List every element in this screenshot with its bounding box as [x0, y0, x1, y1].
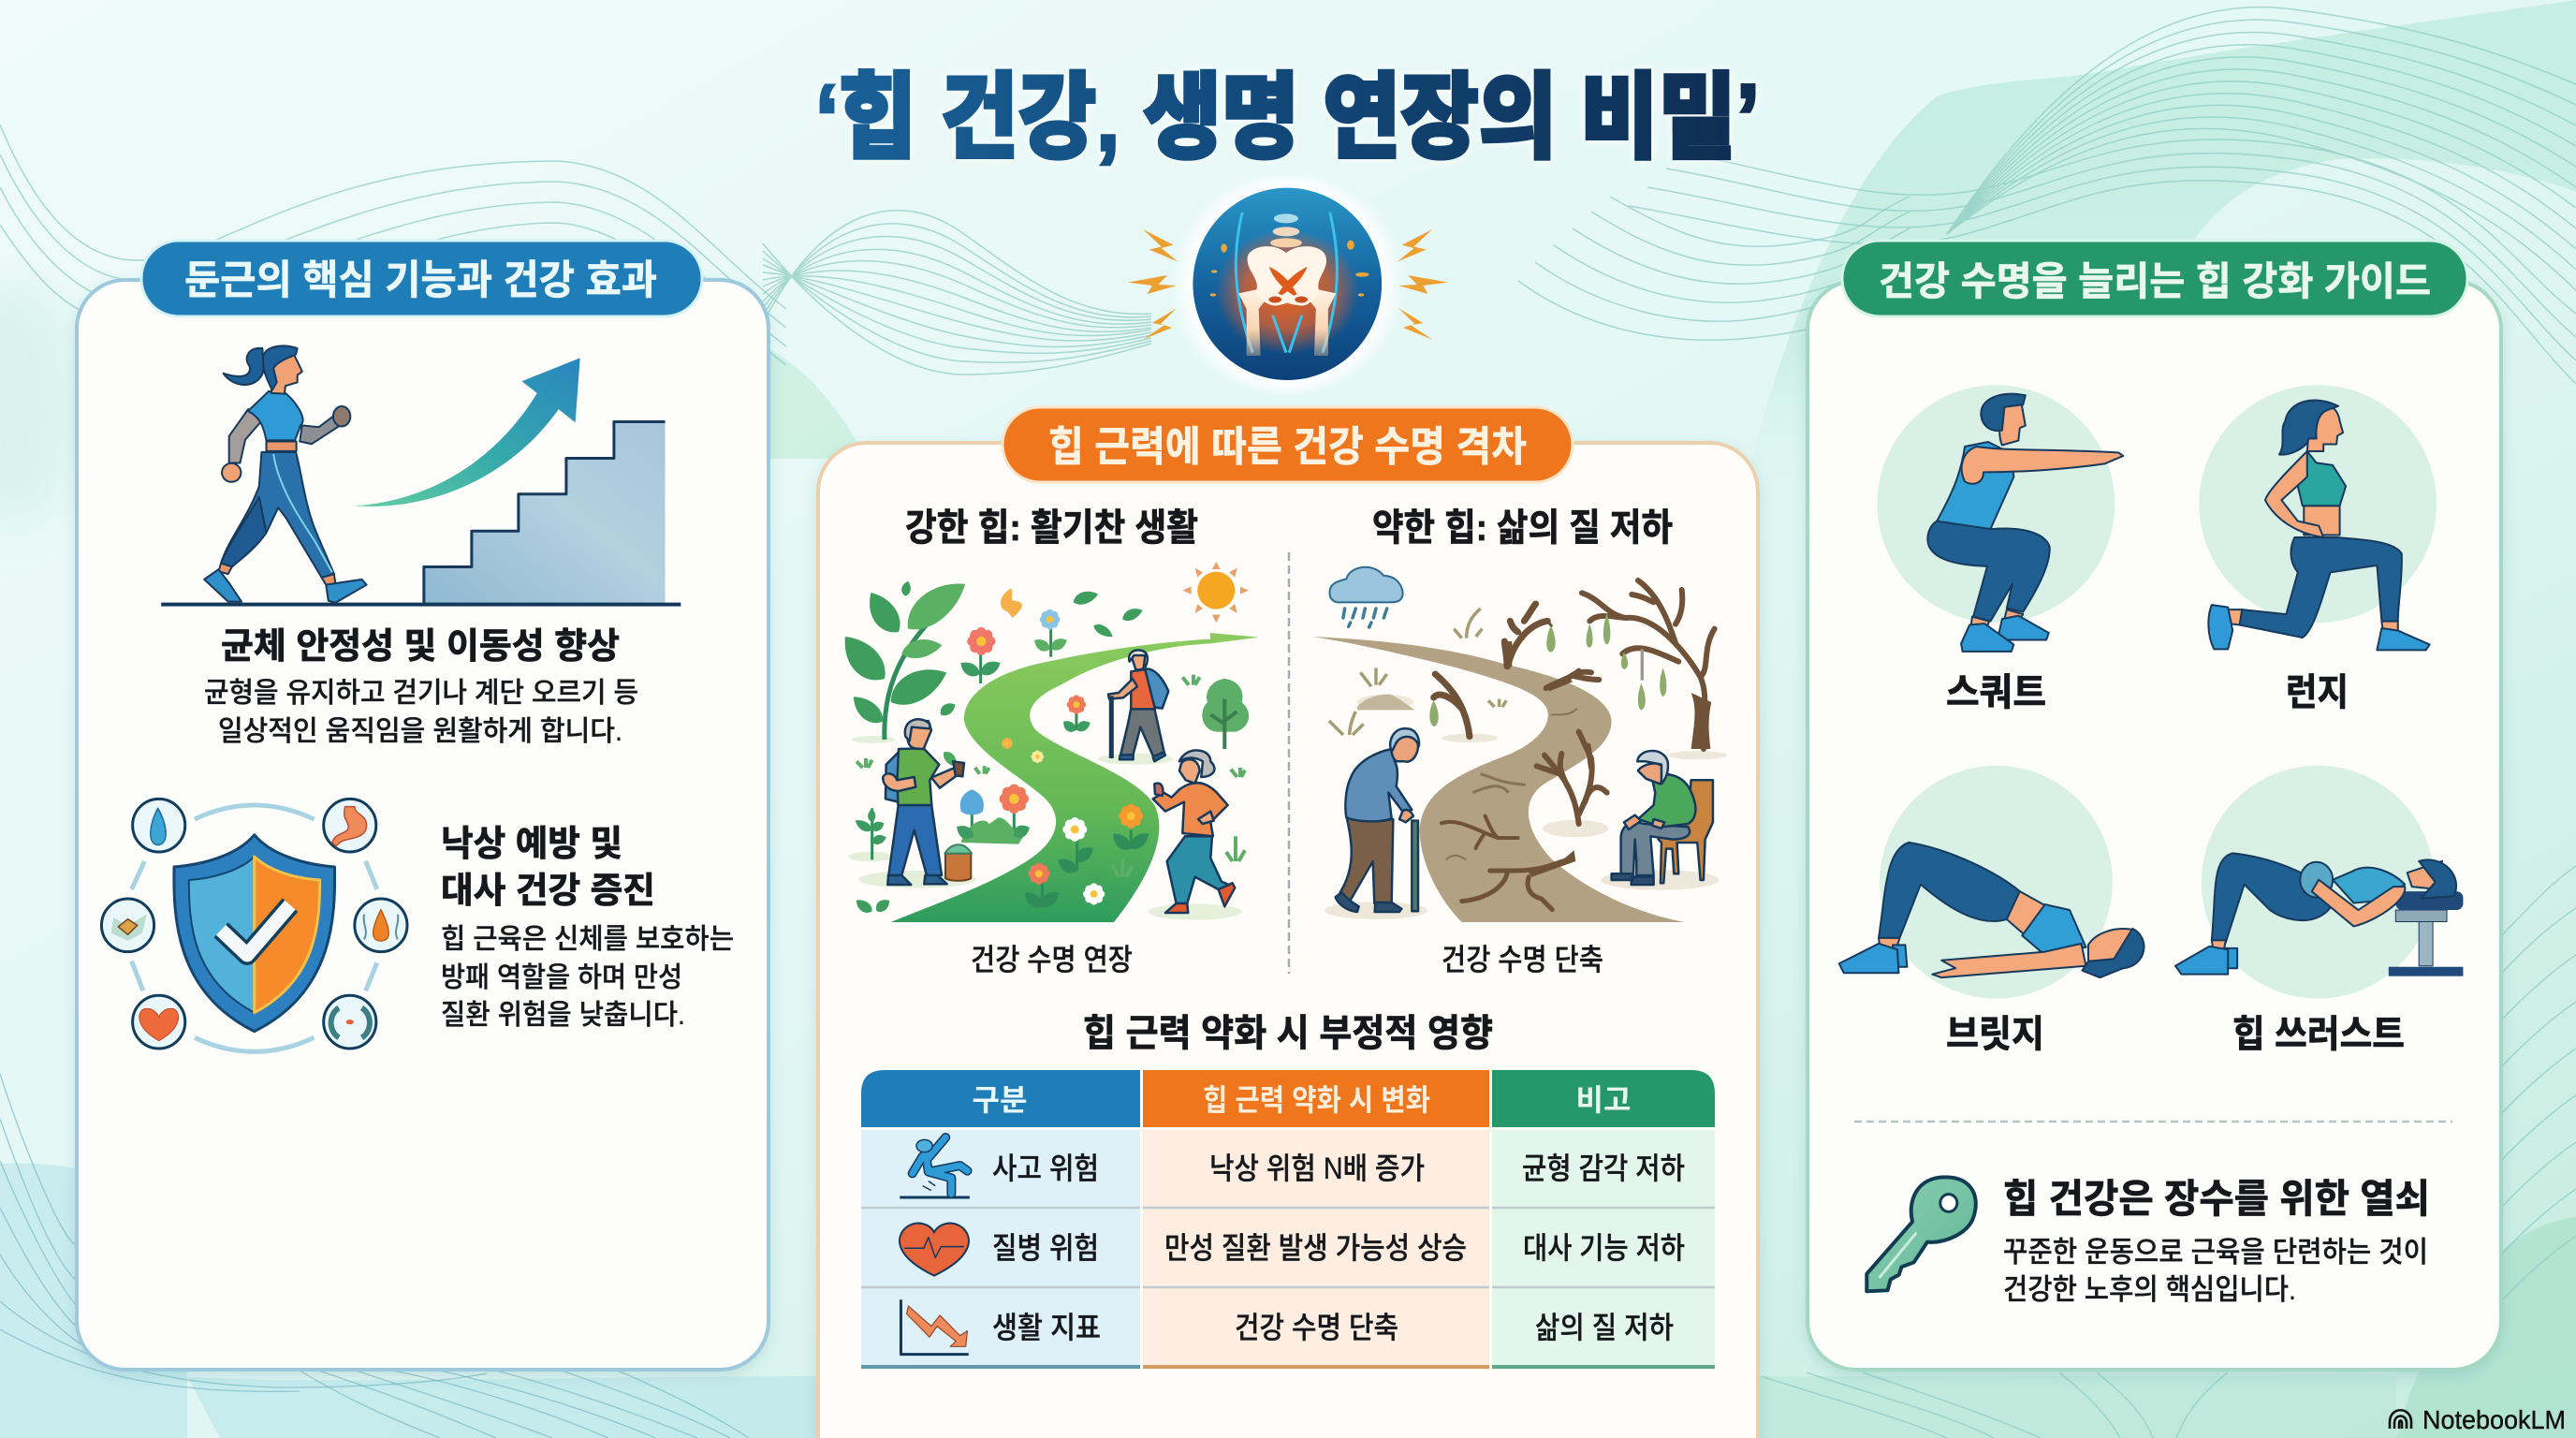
table: negative effects of weak hips: 만성 질환 발생 가능성 상승: [1164, 1231, 1467, 1265]
table: negative effects of weak hips: 삶의 질 저하: [1535, 1311, 1674, 1344]
illustration: active life on green path: [833, 562, 1259, 922]
table: negative effects of weak hips: 낙상 위험 N배 증가: [1209, 1152, 1425, 1185]
icon: key: [1866, 1177, 1976, 1291]
heading: negative effects: 힙 근력 약화 시 부정적 영향: [1083, 1013, 1493, 1054]
panel: health span gap by hip strength: [818, 407, 1758, 1438]
heading pill: glute functions: [141, 241, 702, 316]
table: negative effects of weak hips: 대사 기능 저하: [1523, 1231, 1685, 1265]
text: key message: 힙 건강은 장수를 위한 열쇠: [2003, 1177, 2430, 1221]
panel: hip strengthening guide: [1808, 241, 2501, 1370]
text: balance and mobility: [204, 627, 638, 747]
title: ‘힙 건강, 생명 연장의 비밀’: [815, 66, 1760, 170]
text: balance and mobility: 균체 안정성 및 이동성 향상: [221, 627, 620, 667]
heading pill: hip strengthening guide: 건강 수명을 늘리는 힙 강화 가이드: [1879, 259, 2431, 303]
label: bridge: 브릿지: [1946, 1014, 2044, 1055]
label: hip thrust: 힙 쓰러스트: [2232, 1014, 2405, 1055]
icon: declining chart: [900, 1299, 969, 1355]
table: negative effects of weak hips: 비고: [1576, 1083, 1631, 1117]
icon: hip bones emblem: [1128, 176, 1448, 391]
watermark: NotebookLM: NotebookLM: [2422, 1405, 2566, 1434]
illustration: declining life on dry path: [1312, 567, 1727, 922]
label: squat: 스쿼트: [1946, 672, 2046, 713]
text: balance and mobility: 일상적인 움직임을 원활하게 합니다.: [218, 716, 622, 747]
illustration: bridge: [1839, 766, 2144, 999]
panel: glute functions and health effects: [77, 241, 768, 1370]
subheading: weak hips: 약한 힙: 삶의 질 저하: [1372, 507, 1673, 549]
heading pill: health span gap: 힙 근력에 따른 건강 수명 격차: [1048, 424, 1527, 470]
illustration: walking woman, arrow and stairs: [161, 345, 681, 605]
text: fall prevention and metabolic health: 힙 근육은 신체를 보호하는: [441, 924, 734, 955]
text: balance and mobility: 균형을 유지하고 걷기나 계단 오르기 등: [204, 678, 638, 709]
label: health span shortened: 건강 수명 단축: [1442, 943, 1603, 976]
label: lunge: 런지: [2286, 672, 2349, 713]
heading pill: glute functions: 둔근의 핵심 기능과 건강 효과: [184, 258, 657, 303]
text: life indicator: 생활 지표: [992, 1311, 1101, 1344]
icon: falling person: [900, 1137, 970, 1197]
text: fall prevention and metabolic health: 질환 위험을 낮춥니다.: [441, 1000, 685, 1031]
text: accident risk: 사고 위험: [992, 1152, 1099, 1185]
subheading: strong hips: 강한 힙: 활기찬 생활: [905, 507, 1198, 549]
table: negative effects of weak hips: [861, 1070, 1715, 1369]
table: negative effects of weak hips: 균형 감각 저하: [1522, 1152, 1685, 1185]
text: key message: 건강한 노후의 핵심입니다.: [2003, 1273, 2296, 1306]
illustration: squat: [1878, 385, 2123, 652]
text: fall prevention and metabolic health: 낙상 예방 및: [441, 825, 622, 864]
text: key message: 꾸준한 운동으로 근육을 단련하는 것이: [2003, 1236, 2428, 1269]
icon: shield with health symbols: [101, 799, 407, 1051]
illustration: hip thrust: [2175, 766, 2463, 999]
text: fall prevention and metabolic health: 방패 역할을 하며 만성: [441, 962, 682, 993]
text: disease risk: 질병 위험: [992, 1231, 1099, 1265]
table: negative effects of weak hips: 건강 수명 단축: [1235, 1311, 1398, 1344]
illustration: lunge: [2199, 385, 2437, 650]
label: health span extended: 건강 수명 연장: [971, 943, 1133, 976]
text: fall prevention and metabolic health: [441, 825, 734, 1031]
text: key message: [2003, 1177, 2430, 1306]
text: fall prevention and metabolic health: 대사 건강 증진: [441, 872, 655, 911]
heading pill: health span gap: [1003, 407, 1573, 482]
table: negative effects of weak hips: 구분: [973, 1083, 1027, 1117]
heading pill: hip strengthening guide: [1842, 241, 2467, 316]
icon: heart with pulse: [900, 1224, 969, 1276]
table: negative effects of weak hips: 힙 근력 약화 시 변화: [1203, 1083, 1430, 1117]
